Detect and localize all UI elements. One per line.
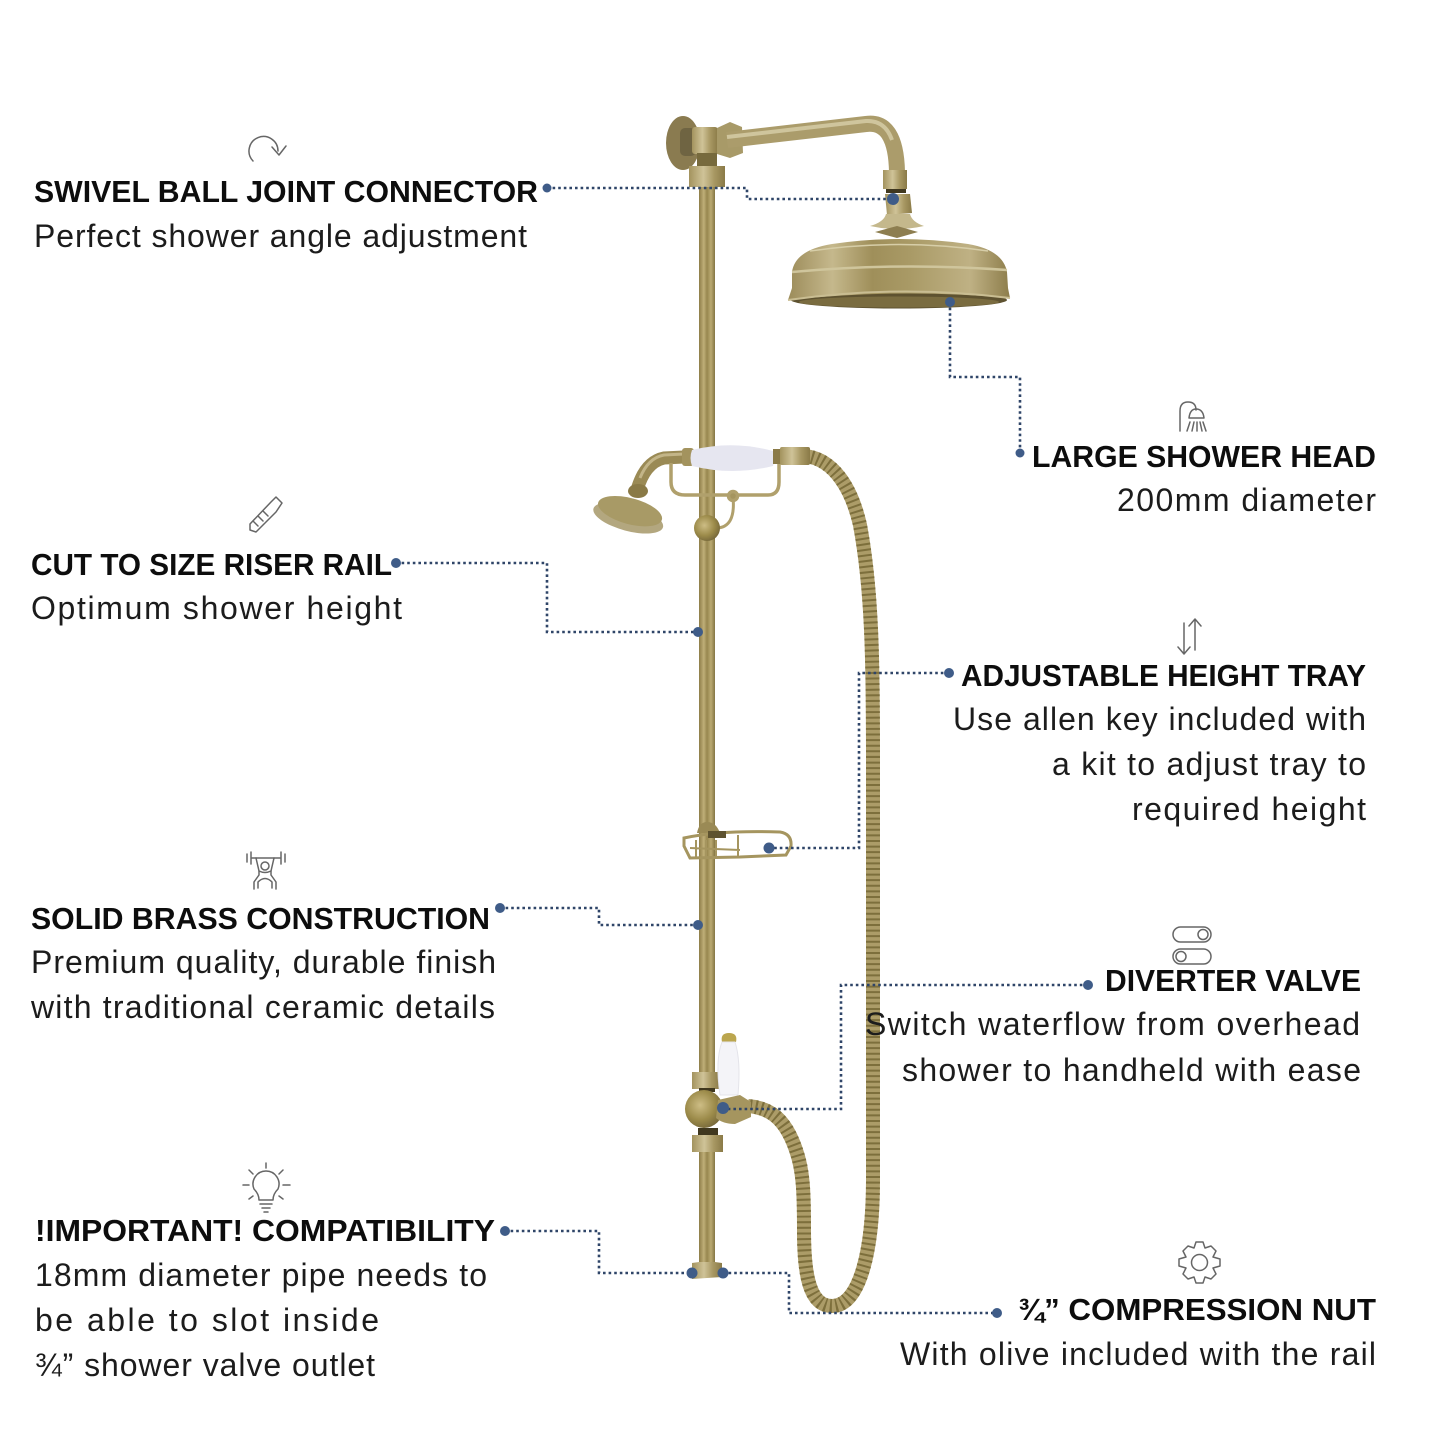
icon: swivel arrow [249, 136, 286, 161]
callout: solid brass construction [30, 901, 496, 1025]
leader: riser rail [391, 558, 703, 637]
icon: gear [1179, 1242, 1220, 1283]
leader: shower head [945, 297, 1024, 458]
ceramic handset grip [682, 445, 810, 471]
description: 18mm diameter pipe needs to [35, 1257, 487, 1293]
ball joint connector [680, 122, 743, 187]
callout: diverter valve [865, 963, 1361, 1088]
callout: important compatibility [35, 1213, 495, 1383]
description [865, 1006, 1361, 1088]
callout: adjustable height tray [953, 658, 1366, 827]
description [953, 701, 1366, 827]
description [35, 1257, 487, 1383]
overhead arm [727, 121, 897, 172]
description: with traditional ceramic details [30, 989, 495, 1025]
handset cradle [671, 463, 779, 528]
heading: ¾” COMPRESSION NUT [1018, 1292, 1376, 1327]
description: Perfect shower angle adjustment [34, 218, 527, 254]
callout: swivel ball joint connector [34, 174, 538, 254]
flexible hose [748, 456, 873, 1306]
description: shower to handheld with ease [902, 1052, 1361, 1088]
rail ball fitting [694, 515, 720, 541]
icon: saw [250, 497, 282, 532]
handheld shower head [590, 454, 684, 540]
leader: solid brass [495, 903, 703, 930]
heading: DIVERTER VALVE [1105, 963, 1361, 998]
riser rail lower [699, 1150, 715, 1264]
description: 200mm diameter [1117, 482, 1376, 518]
callout: compression nut [900, 1292, 1376, 1372]
description: Use allen key included with [953, 701, 1366, 737]
description [30, 944, 496, 1025]
description: With olive included with the rail [900, 1336, 1376, 1372]
riser rail upper [699, 186, 715, 1074]
ceramic lever [718, 1033, 739, 1095]
bottom compression nut [692, 1262, 722, 1279]
soap tray [684, 822, 791, 858]
diverter valve [685, 1072, 751, 1152]
callout: large shower head [1032, 439, 1376, 518]
description: required height [1132, 791, 1366, 827]
leader: diverter valve [717, 980, 1093, 1114]
description: ¾” shower valve outlet [35, 1347, 375, 1383]
heading: !IMPORTANT! COMPATIBILITY [35, 1213, 495, 1248]
icon: weightlifter [247, 852, 285, 889]
description: be able to slot inside [35, 1302, 379, 1338]
icon: toggle switches [1173, 927, 1211, 964]
callout: cut to size riser rail [31, 547, 402, 626]
leader: swivel joint [542, 184, 899, 205]
leader: compatibility [500, 1226, 698, 1278]
leader: compression nut [718, 1268, 1002, 1318]
description: Switch waterflow from overhead [865, 1006, 1360, 1042]
description: Premium quality, durable finish [31, 944, 496, 980]
heading: LARGE SHOWER HEAD [1032, 439, 1376, 474]
overhead shower head [788, 170, 1010, 308]
icon: up and down arrows [1178, 619, 1201, 654]
heading: SWIVEL BALL JOINT CONNECTOR [34, 174, 538, 209]
heading: ADJUSTABLE HEIGHT TRAY [961, 658, 1366, 693]
description: a kit to adjust tray to [1052, 746, 1366, 782]
leader: height tray [764, 668, 954, 854]
icon: light bulb [243, 1163, 290, 1212]
heading: CUT TO SIZE RISER RAIL [31, 547, 392, 582]
description: Optimum shower height [31, 590, 402, 626]
wall flange [666, 116, 700, 170]
heading: SOLID BRASS CONSTRUCTION [31, 901, 490, 936]
icon: shower [1180, 402, 1206, 431]
product: rail shower set [590, 116, 1010, 1306]
